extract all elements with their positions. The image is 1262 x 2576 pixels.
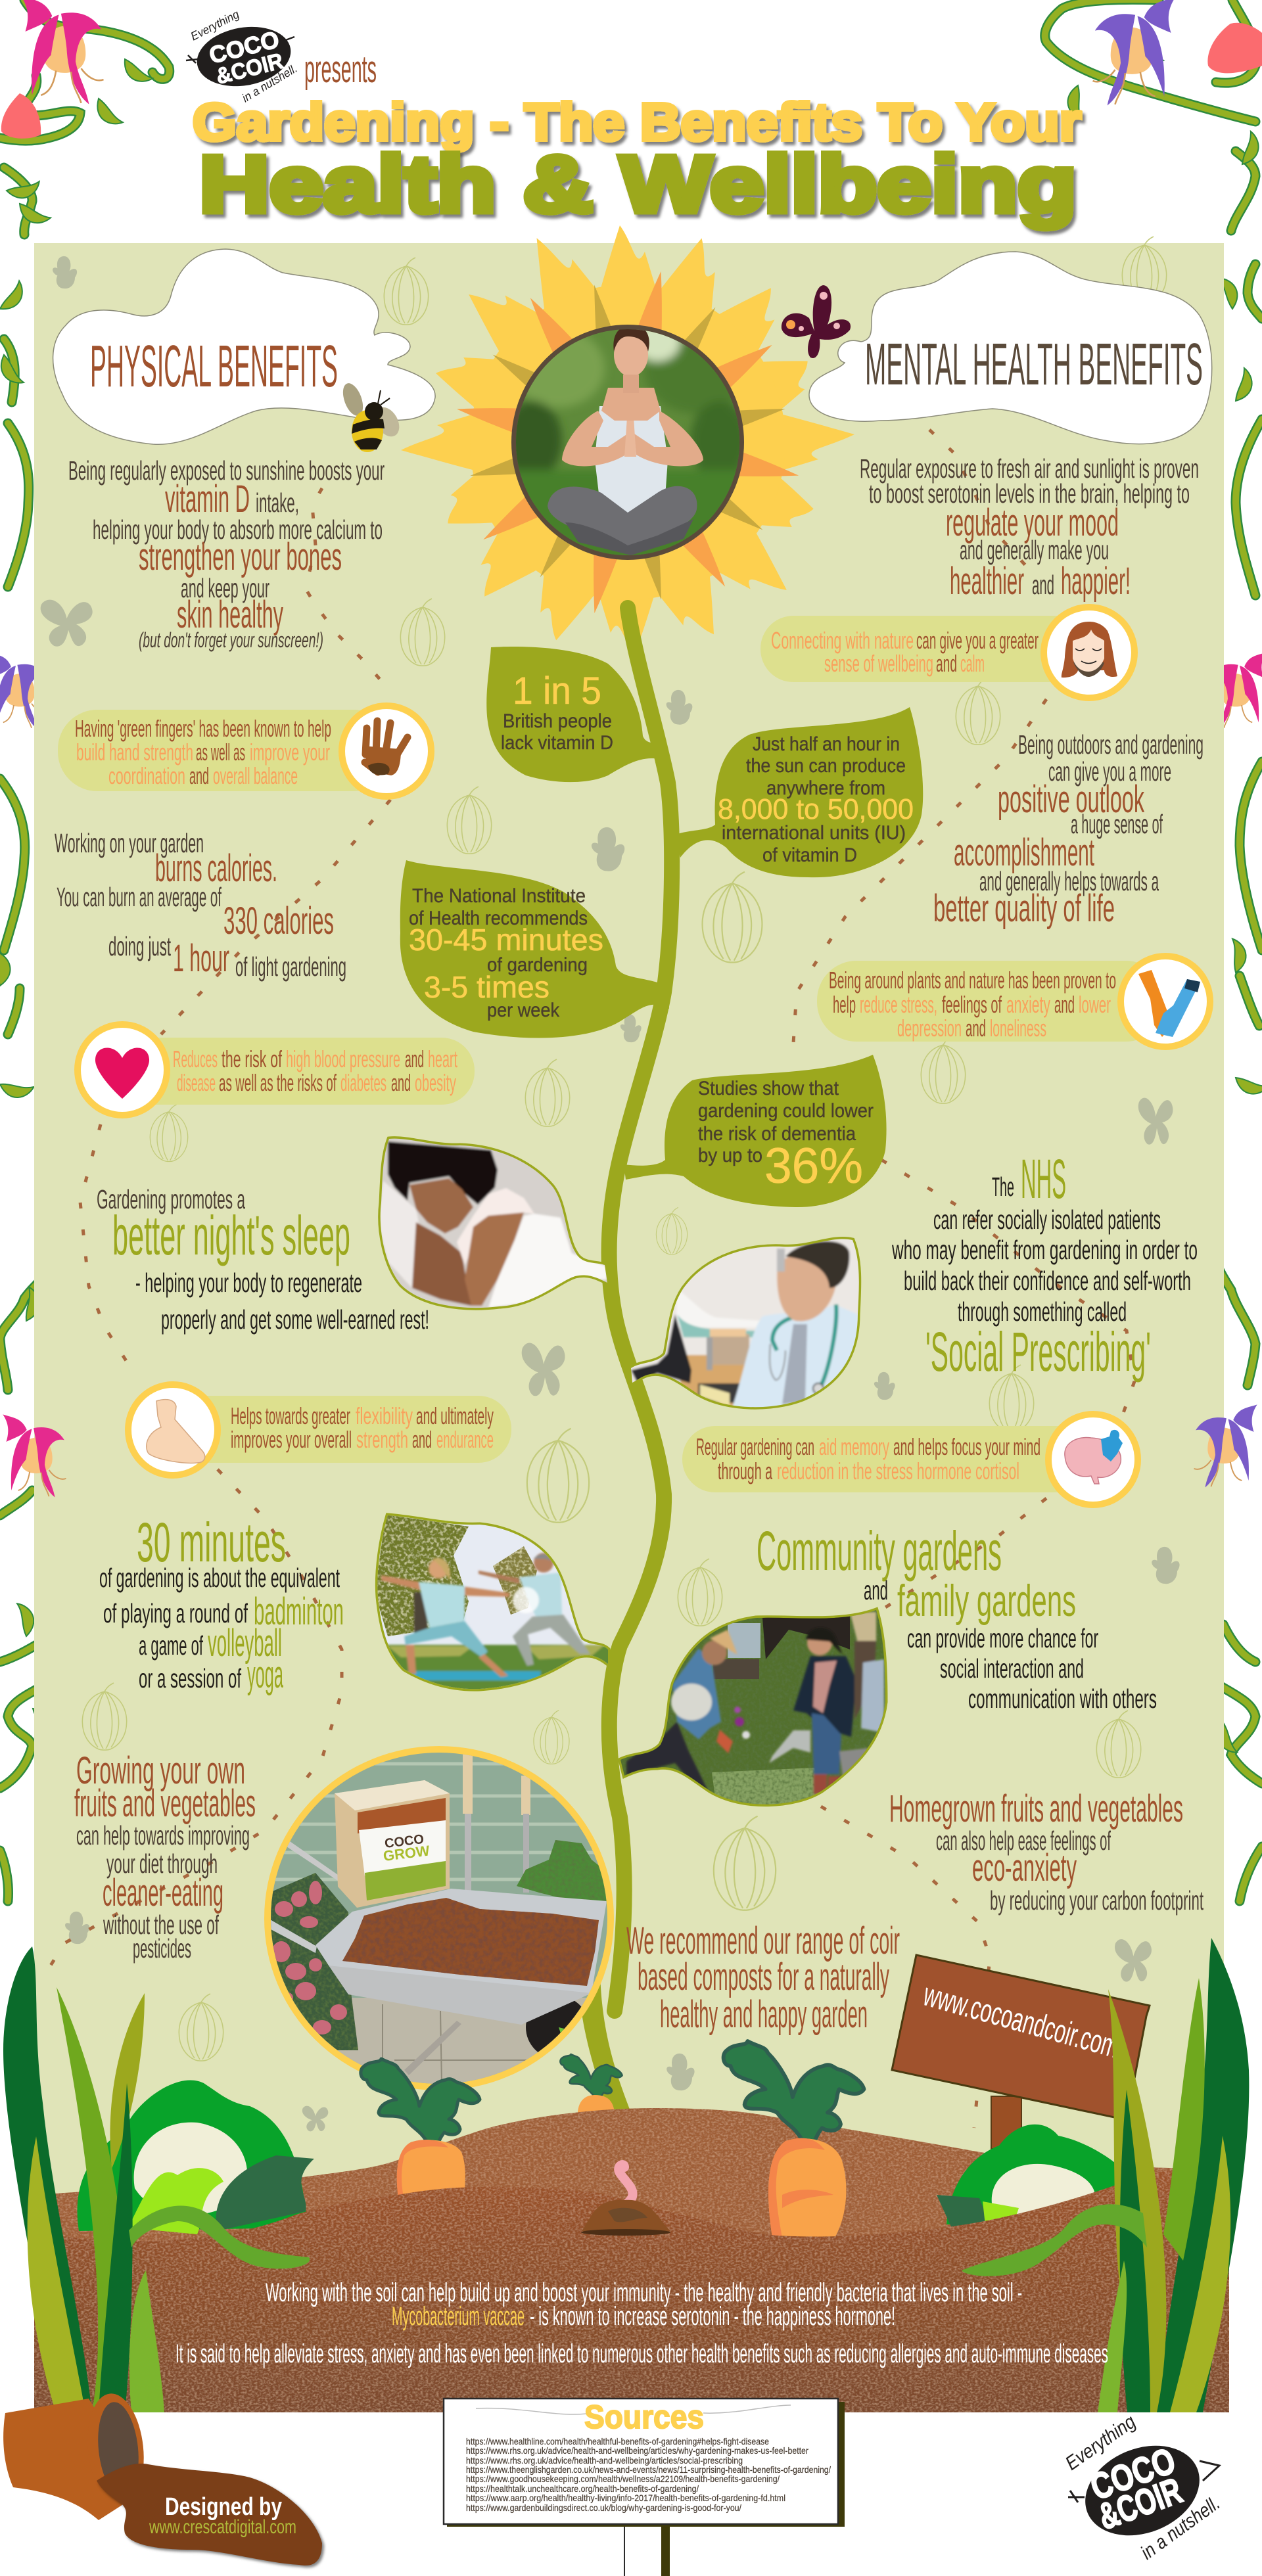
cloud: physical benefits bbox=[53, 249, 435, 444]
carrot: left bbox=[361, 2059, 480, 2198]
title line one: Gardening - The Benefits To Your bbox=[193, 93, 1081, 151]
leaf: half an hour in the sun bbox=[676, 707, 923, 877]
text: burns calories: burns calories. bbox=[155, 847, 277, 890]
text: vitamin D physical benefit: strengthen your bones bbox=[139, 536, 342, 578]
pill: blood pressure: and bbox=[391, 1069, 411, 1096]
text: burns calories bbox=[55, 828, 346, 982]
text: growing your own bbox=[74, 1749, 256, 1964]
text: vitamin D physical benefit bbox=[68, 455, 385, 652]
text: positive outlook: accomplishment bbox=[954, 831, 1094, 874]
man bbox=[479, 1571, 519, 1584]
text: NHS social prescribing: The bbox=[992, 1172, 1014, 1202]
pill: reduce stress: lower bbox=[1079, 991, 1111, 1018]
text: growing your own: cleaner-eating bbox=[103, 1872, 223, 1914]
text: recommend composts bbox=[626, 1920, 900, 2036]
text: mood mental benefit: and generally make you bbox=[960, 535, 1109, 565]
flower: right edge purple bbox=[1194, 1404, 1257, 1488]
text: growing your own: can help towards improving bbox=[76, 1820, 250, 1851]
text: burns calories: Working on your garden bbox=[55, 828, 204, 858]
woman bbox=[381, 1575, 509, 1597]
pill: green fingers: build hand strength bbox=[76, 739, 193, 766]
icon: flexed arm bbox=[128, 1385, 218, 1475]
source links: https://www.aarp.org/health/healthy-living/info-2017/health-benefits-of-gardening-fd.html bbox=[466, 2493, 785, 2503]
pill: flexibility: strength bbox=[356, 1426, 408, 1453]
leaf: 1 in 5: 1 in 5 bbox=[513, 670, 601, 712]
text: community gardens: family gardens bbox=[897, 1576, 1076, 1626]
pill: flexibility: and ultimately bbox=[416, 1402, 494, 1429]
flower: top left pink bbox=[21, 0, 104, 104]
logo top: &COIR bbox=[214, 49, 286, 89]
text: soil immunity benefits bbox=[175, 2278, 1108, 2368]
wheel bbox=[526, 1996, 589, 2059]
text: burns calories: 330 calories bbox=[223, 900, 334, 942]
text: NHS social prescribing bbox=[891, 1148, 1198, 1383]
source links: https://www.theenglishgarden.co.uk/news-and-events/news/11-surprising-health-benefits-of-gardening/ bbox=[466, 2464, 831, 2475]
pill: flexibility: flexibility bbox=[356, 1402, 413, 1429]
leaf: half an hour in the sun: Just half an hour in bbox=[753, 733, 900, 755]
text: community gardens: social interaction and bbox=[940, 1653, 1084, 1684]
icon: brain and puzzle bbox=[1048, 1414, 1138, 1505]
leaf: NIH recommendation: The National Institute bbox=[412, 885, 586, 907]
cloud: physical benefits: PHYSICAL BENEFITS bbox=[90, 334, 338, 400]
pill: memory: reduction in the stress hormone cortisol bbox=[777, 1458, 1019, 1484]
pill: reduce stress: and bbox=[966, 1015, 986, 1042]
leaf: half an hour in the sun: 8,000 to 50,000 bbox=[718, 793, 914, 825]
photo: woman meditating bbox=[503, 322, 749, 568]
head and hair bbox=[614, 336, 648, 375]
pill: connecting with nature bbox=[760, 616, 1089, 682]
leaf: NIH recommendation: of gardening bbox=[487, 954, 588, 976]
sources sign bbox=[444, 2399, 845, 2576]
pill: memory bbox=[682, 1426, 1090, 1492]
pill: green fingers: improve your bbox=[250, 739, 330, 766]
soil: back hill bbox=[34, 2108, 1229, 2412]
source links: https://www.goodhousekeeping.com/health/wellness/a22109/health-benefits-gardening/ bbox=[466, 2473, 780, 2484]
pill: connecting with nature: can give you a greater bbox=[916, 627, 1039, 654]
dotted trail lines bbox=[44, 430, 1134, 2128]
photo circle: wheelbarrow of coir bbox=[263, 1741, 618, 2096]
pill: connecting with nature: sense of wellbeing bbox=[824, 650, 933, 677]
woman top and arms bbox=[595, 406, 668, 516]
logo bottom right: COCO bbox=[1085, 2439, 1180, 2508]
leaf: 1 in 5: lack vitamin D bbox=[501, 732, 613, 754]
text: community gardens bbox=[757, 1520, 1157, 1714]
text: 30 minutes: yoga bbox=[247, 1653, 283, 1696]
icon: bee bbox=[339, 380, 404, 452]
pill: green fingers: coordination bbox=[108, 762, 185, 789]
icon: heart top right bbox=[1207, 23, 1262, 73]
pill: memory: aid memory bbox=[819, 1433, 889, 1460]
text: growing your own: your diet through bbox=[106, 1849, 218, 1879]
icon: calm face bbox=[1044, 607, 1134, 698]
icon: heart bbox=[78, 1024, 167, 1115]
text: vitamin D physical benefit: helping your body to absorb more calcium to bbox=[93, 515, 383, 545]
text: burns calories: You can burn an average of bbox=[57, 882, 222, 912]
logo bottom right: Everything bbox=[1062, 2411, 1140, 2475]
leaf: 1 in 5 bbox=[486, 647, 659, 782]
logo top bbox=[186, 7, 300, 104]
pill: reduce stress: depression bbox=[897, 1015, 962, 1042]
cabbage: right bbox=[937, 2125, 1143, 2231]
leaf: dementia: Studies show that bbox=[698, 1078, 839, 1099]
logo top: in a nutshell. bbox=[240, 62, 300, 104]
text: 30 minutes: of playing a round of bbox=[103, 1598, 248, 1628]
spilled soil and designer credit: www.crescatdigital.com bbox=[149, 2516, 296, 2538]
lower stem to small carrot bbox=[578, 1971, 631, 2113]
pill: flexibility: Helps towards greater bbox=[231, 1402, 350, 1429]
foliage bbox=[517, 1840, 608, 1902]
text: community gardens: and bbox=[864, 1575, 888, 1605]
pill: blood pressure: diabetes bbox=[340, 1069, 386, 1096]
text: 30 minutes bbox=[99, 1511, 344, 1696]
text: positive outlook: positive outlook bbox=[998, 778, 1145, 821]
pill: flexibility: endurance bbox=[436, 1426, 494, 1453]
text: better night's sleep: - helping your body to regenerate bbox=[135, 1268, 362, 1298]
pill: blood pressure: disease bbox=[177, 1069, 216, 1096]
pill: green fingers: Having 'green fingers' has been known to help bbox=[75, 715, 331, 742]
pill: reduce stress: help bbox=[833, 991, 856, 1018]
pill: green fingers bbox=[58, 710, 393, 791]
text: better night's sleep: properly and get some well-earned rest! bbox=[161, 1304, 429, 1335]
pill: reduce stress: loneliness bbox=[990, 1015, 1046, 1042]
pill: memory: Regular gardening can bbox=[696, 1433, 814, 1460]
text: 30 minutes: 30 minutes bbox=[137, 1511, 286, 1573]
leaf: dementia: 36% bbox=[764, 1138, 863, 1194]
text: better night's sleep: better night's sleep bbox=[112, 1205, 350, 1266]
text: recommend composts: healthy and happy garden bbox=[660, 1993, 868, 2036]
text: vitamin D physical benefit: and keep your bbox=[181, 573, 269, 603]
flower: left edge purple bbox=[0, 653, 47, 729]
panel: background bbox=[34, 243, 1224, 2412]
source links: https://www.gardenbuildingsdirect.co.uk/blog/why-gardening-is-good-for-you/ bbox=[466, 2502, 741, 2513]
text: community gardens: can provide more chance for bbox=[907, 1623, 1098, 1653]
icon: holding hands gloves bbox=[1121, 956, 1210, 1047]
text: vitamin D physical benefit: (but don't forget your sunscreen!) bbox=[139, 628, 323, 652]
leaf: NIH recommendation: 30-45 minutes bbox=[409, 923, 603, 957]
cabbage: left bbox=[78, 2080, 314, 2234]
pill: green fingers: as well as bbox=[196, 739, 245, 766]
pill: reduce stress: feelings of bbox=[942, 991, 1002, 1018]
title bbox=[193, 93, 1081, 229]
icon: heart top left bbox=[1, 93, 41, 139]
photo leaf: woman sleeping bbox=[378, 1137, 608, 1311]
worm and mound bbox=[581, 2165, 670, 2236]
pill: reduce stress: reduce stress, bbox=[860, 991, 937, 1018]
text: homegrown fruit eco-anxiety bbox=[889, 1787, 1204, 1916]
text: community gardens: Community gardens bbox=[757, 1520, 1002, 1582]
soil: front hill bbox=[34, 2169, 1229, 2412]
source links: https://www.rhs.org.uk/advice/health-and-wellbeing/articles/why-gardening-makes-us-feel-better bbox=[466, 2445, 808, 2456]
right woman bbox=[850, 1612, 876, 1643]
photo leaf: doctor bbox=[628, 1235, 861, 1414]
girl bbox=[793, 1656, 856, 1737]
text: positive outlook: better quality of life bbox=[933, 887, 1115, 930]
pill: blood pressure bbox=[121, 1038, 475, 1105]
flower: left edge pink bbox=[3, 1414, 66, 1497]
text: mood mental benefit: healthier bbox=[950, 560, 1024, 603]
text: vitamin D physical benefit: Being regularly exposed to sunshine boosts your bbox=[68, 455, 385, 486]
text: 30 minutes: badminton bbox=[254, 1590, 344, 1633]
pill: blood pressure: obesity bbox=[415, 1069, 456, 1096]
tray bbox=[316, 1889, 607, 2025]
text: NHS social prescribing: NHS bbox=[1021, 1148, 1066, 1210]
sign: website: www.cocoandcoir.com bbox=[919, 1975, 1123, 2065]
spilled soil and designer credit: Designed by bbox=[165, 2493, 282, 2521]
pill: blood pressure: Reduces bbox=[173, 1046, 218, 1072]
text: better night's sleep: Gardening promotes a bbox=[97, 1184, 245, 1214]
knocked-over flower pot bbox=[3, 2391, 322, 2565]
text: burns calories: 1 hour bbox=[173, 937, 229, 980]
text: 30 minutes: of gardening is about the equivalent bbox=[99, 1563, 340, 1593]
men bbox=[672, 1648, 721, 1739]
leaf: NIH recommendation: per week bbox=[487, 1000, 560, 1021]
pill: green fingers: overall balance bbox=[213, 762, 298, 789]
leaf: dementia: by up to bbox=[698, 1145, 762, 1166]
sign: website bbox=[892, 1955, 1150, 2149]
pill: connecting with nature: Connecting with nature bbox=[771, 627, 914, 654]
flower: right edge pink bbox=[1208, 653, 1262, 729]
pill: memory: and helps focus your mind bbox=[893, 1433, 1040, 1460]
text: positive outlook bbox=[933, 729, 1204, 930]
product box bbox=[335, 1780, 450, 1908]
logo bottom right: in a nutshell. bbox=[1137, 2493, 1224, 2564]
carrot: small middle bbox=[560, 2054, 622, 2116]
icon: butterfly bbox=[782, 285, 851, 358]
leaf: NIH recommendation: of Health recommends bbox=[409, 908, 588, 929]
stem bbox=[609, 608, 672, 2011]
soil bbox=[342, 1898, 599, 1986]
legs bbox=[548, 486, 697, 549]
text: vitamin D physical benefit: vitamin D bbox=[165, 478, 250, 520]
logo top: COCO bbox=[206, 26, 282, 69]
text: mood mental benefit: happier! bbox=[1061, 560, 1131, 603]
flower: top right purple bbox=[1092, 0, 1175, 106]
text: growing your own: fruits and vegetables bbox=[74, 1782, 256, 1825]
leaf: NIH recommendation: 3-5 times bbox=[424, 970, 549, 1004]
sunflower bbox=[401, 218, 854, 655]
pill: flexibility bbox=[173, 1396, 511, 1463]
text: growing your own: Growing your own bbox=[76, 1749, 245, 1792]
text: burns calories: doing just bbox=[108, 931, 171, 961]
leaf: half an hour in the sun: anywhere from bbox=[766, 777, 885, 799]
photo circle: wheelbarrow of coir: COCO bbox=[384, 1832, 425, 1851]
leaf: half an hour in the sun: the sun can produce bbox=[746, 755, 906, 777]
pill: green fingers: and bbox=[189, 762, 209, 789]
text: 30 minutes: or a session of bbox=[139, 1663, 241, 1693]
leaf: NIH recommendation bbox=[400, 860, 669, 1038]
text: homegrown fruit eco-anxiety: eco-anxiety bbox=[972, 1847, 1077, 1889]
leaf: dementia: the risk of dementia bbox=[698, 1123, 856, 1145]
heading: sources: Sources bbox=[584, 2399, 704, 2435]
title line two: Health & Wellbeing bbox=[199, 139, 1077, 229]
source links bbox=[466, 2436, 831, 2513]
text: NHS social prescribing: through something called bbox=[958, 1297, 1127, 1327]
grass: right bbox=[962, 1938, 1249, 2412]
leaf: half an hour in the sun: of vitamin D bbox=[762, 844, 857, 866]
text: vitamin D physical benefit: skin healthy bbox=[177, 593, 283, 636]
text: positive outlook: a huge sense of bbox=[1071, 809, 1163, 839]
text: presents bbox=[304, 48, 377, 91]
logo bottom right bbox=[1062, 2411, 1224, 2564]
cloud: mental health benefits bbox=[809, 252, 1212, 444]
text: 30 minutes: volleyball bbox=[208, 1622, 282, 1665]
pill: reduce stress: anxiety bbox=[1006, 991, 1050, 1018]
doctor bbox=[732, 1304, 858, 1410]
text: growing your own: pesticides bbox=[133, 1933, 191, 1964]
pill: reduce stress bbox=[817, 961, 1165, 1042]
carrot: right bbox=[724, 2041, 864, 2238]
pill: memory: through a bbox=[718, 1458, 773, 1484]
pill: connecting with nature: and bbox=[936, 650, 957, 677]
icon: muddy hand bbox=[342, 706, 431, 796]
leaf: dementia: gardening could lower bbox=[698, 1100, 874, 1122]
text: 30 minutes: a game of bbox=[139, 1630, 203, 1661]
grass: left bbox=[3, 1946, 310, 2412]
leaf: dementia bbox=[624, 1055, 887, 1207]
leaf: half an hour in the sun: international units (IU) bbox=[722, 822, 906, 844]
photo leaf: community gardeners bbox=[618, 1603, 887, 1814]
photo leaf: yoga couple bbox=[375, 1511, 611, 1695]
logo bottom right: &COIR bbox=[1093, 2470, 1187, 2537]
text: mood mental benefit bbox=[860, 453, 1199, 603]
pill: connecting with nature: calm bbox=[960, 650, 985, 677]
text: vitamin D physical benefit: intake, bbox=[256, 488, 299, 518]
decorative onions and silhouettes bbox=[41, 237, 1180, 2131]
pill: blood pressure: the risk of bbox=[222, 1046, 283, 1072]
pill: blood pressure: as well as the risks of bbox=[219, 1069, 337, 1096]
text: mood mental benefit: and bbox=[1032, 570, 1054, 600]
pill: flexibility: and bbox=[412, 1426, 432, 1453]
pill: blood pressure: and bbox=[405, 1046, 424, 1072]
logo top: Everything bbox=[189, 7, 241, 43]
pill: blood pressure: heart bbox=[428, 1046, 457, 1072]
pill: flexibility: improves your overall bbox=[231, 1426, 352, 1453]
side vines bbox=[0, 0, 1262, 1901]
pill: reduce stress: and bbox=[1054, 991, 1075, 1018]
text: soil immunity benefits: Mycobacterium vaccae bbox=[392, 2302, 525, 2331]
source links: https://www.healthline.com/health/healthful-benefits-of-gardening#helps-fight-disease bbox=[466, 2436, 769, 2447]
text: better night's sleep bbox=[97, 1184, 429, 1335]
source links: https://www.rhs.org.uk/advice/health-and-wellbeing/articles/social-prescribing bbox=[466, 2455, 743, 2466]
spilled soil and designer credit bbox=[97, 2464, 322, 2565]
source links: https://healthtalk.unchealthcare.org/health-benefits-of-gardening/ bbox=[466, 2483, 699, 2494]
text: growing your own: without the use of bbox=[103, 1910, 219, 1940]
photo circle: wheelbarrow of coir: GROW bbox=[383, 1842, 431, 1864]
text: recommend composts: based composts for a naturally bbox=[638, 1956, 889, 1998]
leaf: 1 in 5: British people bbox=[503, 710, 612, 732]
text: soil immunity benefits: - is known to increase serotonin - the happiness hormone! bbox=[530, 2302, 895, 2331]
text: We recommend our range of coir bbox=[626, 1920, 900, 1962]
pill: blood pressure: high blood pressure bbox=[286, 1046, 400, 1072]
text: burns calories: of light gardening bbox=[235, 952, 346, 982]
